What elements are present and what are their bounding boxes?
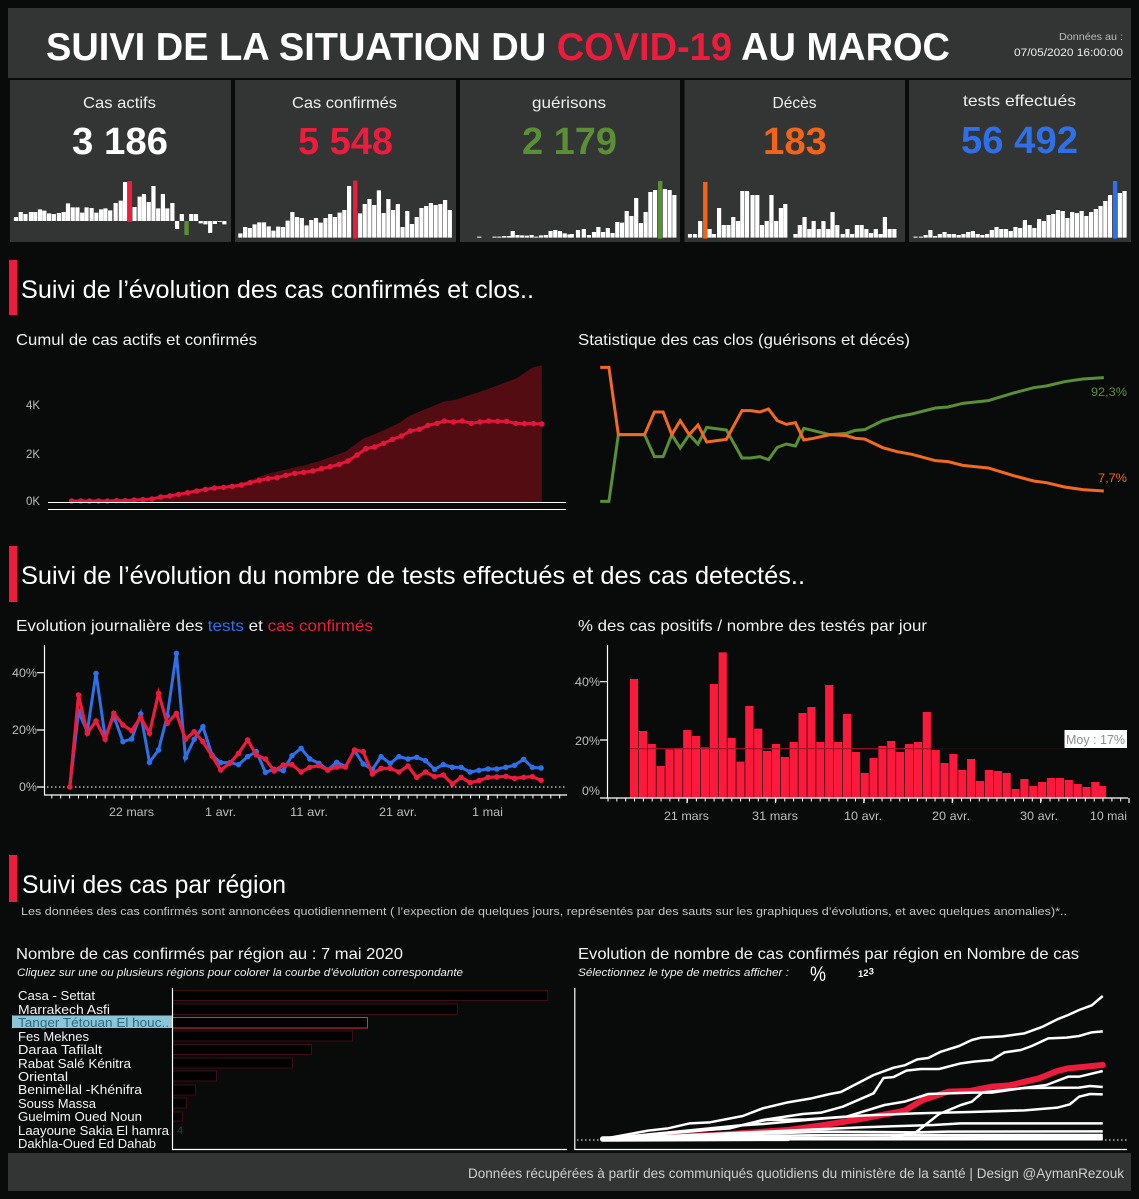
bar chart: cas par région: Dakhla-Oued Ed Dahab	[18, 1136, 156, 1151]
icon: nombres: 3	[869, 966, 874, 978]
bar chart: cas par région: Laayoune Sakia El hamra	[18, 1123, 170, 1138]
label: moyenne: Moy : 17%	[1066, 733, 1125, 747]
header banner	[8, 8, 1131, 78]
label: guérisons 92,3%: 92,3%	[1091, 385, 1127, 399]
icon: nombres: 2	[863, 968, 869, 979]
chart heading: cas par région	[16, 946, 463, 979]
title: SUIVI DE LA SITUATION DU COVID-19 AU MAROC	[46, 26, 950, 69]
icon: pourcentage: %	[810, 963, 826, 986]
data date	[1014, 31, 1123, 59]
chart heading: évolution par région	[578, 946, 1079, 979]
area chart: cumul actifs et confirmés: 4K	[26, 398, 40, 412]
footer: Données récupérées à partir des communiqués quotidiens du ministère de la santé | Design @AymanRezouk	[468, 1166, 1124, 1181]
chart heading: évolution par région: Evolution de nombre de cas confirmés par région en Nombre de cas	[578, 946, 1079, 963]
area chart: cumul actifs et confirmés	[26, 365, 566, 510]
section heading: cas confirmés et clos: Suivi de l’évolution des cas confirmés et clos..	[21, 276, 534, 304]
panel: cas actifs	[10, 80, 231, 242]
panel: guérisons: guérisons	[532, 95, 606, 112]
panel: tests effectués: tests effectués	[963, 93, 1076, 110]
section heading: cas confirmés et clos	[9, 260, 534, 315]
bar chart: cas par région: Rabat Salé Kénitra	[18, 1056, 132, 1071]
line chart: cas clos	[600, 367, 1127, 501]
section heading: région: Suivi des cas par région	[22, 871, 286, 899]
bar chart: cas par région: Oriental	[18, 1069, 68, 1084]
chart heading: cas par région: Cliquez sur une ou plusieurs régions pour colorer la courbe d’évolution correspondante	[17, 967, 463, 979]
bar chart: cas par région	[12, 988, 567, 1151]
panel: tests effectués: 56 492	[961, 120, 1078, 162]
chart heading: cas clos: Statistique des cas clos (guérisons et décés)	[578, 332, 910, 349]
bar chart: % positifs par jour: 10 mai	[1090, 809, 1127, 823]
panel: cas actifs: Cas actifs	[83, 95, 156, 112]
area chart: cumul actifs et confirmés: 0K	[26, 494, 40, 508]
line chart: évolution par région	[575, 988, 1128, 1150]
bar chart: % positifs par jour: 0%	[582, 784, 600, 798]
area chart: cumul actifs et confirmés: 2K	[26, 447, 40, 461]
bar chart: % positifs par jour	[575, 645, 1129, 823]
line chart: tests et cas confirmés: 0%	[19, 780, 37, 794]
panel: cas confirmés: 5 548	[298, 121, 393, 163]
bar chart: % positifs par jour: 20 avr.	[932, 809, 970, 823]
bar chart: cas par région: Souss Massa	[18, 1096, 97, 1111]
panel: décès: 183	[763, 121, 827, 163]
bar chart: cas par région: Benimèllal -Khénifra	[18, 1082, 143, 1097]
panel: guérisons: 2 179	[522, 121, 617, 163]
line chart: tests et cas confirmés: 40%	[12, 666, 37, 680]
section heading: tests: Suivi de l’évolution du nombre de tests effectués et des cas detectés..	[21, 562, 805, 590]
bar chart: % positifs par jour: 20%	[575, 734, 600, 748]
bar chart: % positifs par jour: 31 mars	[752, 809, 798, 823]
bar chart: % positifs par jour: 30 avr.	[1020, 809, 1058, 823]
line chart: tests et cas confirmés: 1 mai	[472, 805, 503, 819]
chart heading: cas par région: Nombre de cas confirmés par région au : 7 mai 2020	[16, 946, 403, 963]
panel: guérisons	[460, 80, 680, 242]
line chart: tests et cas confirmés: 21 avr.	[379, 805, 417, 819]
chart heading: % des cas positifs: % des cas positifs / nombre des testés par jour	[578, 618, 928, 635]
data date: 07/05/2020 16:00:00	[1014, 47, 1123, 59]
chart heading: évolution par région: Sélectionnez le type de metrics afficher :	[578, 967, 789, 979]
line chart: tests et cas confirmés: 11 avr.	[290, 805, 328, 819]
bar chart: cas par région: Casa - Settat	[18, 988, 95, 1003]
bar chart: cas par région: Tanger Tétouan El houc..	[18, 1015, 169, 1030]
bar chart: % positifs par jour: 10 avr.	[844, 809, 882, 823]
bar chart: cas par région: 4	[177, 1125, 183, 1137]
line chart: tests et cas confirmés: 20%	[12, 723, 37, 737]
bar chart: % positifs par jour: 40%	[575, 675, 600, 689]
panel: tests effectués	[909, 80, 1131, 242]
section heading: région	[9, 855, 286, 902]
line chart: tests et cas confirmés	[12, 645, 567, 819]
section heading: tests	[9, 546, 805, 602]
panel: décès	[684, 80, 905, 242]
note: données: Les données des cas confirmés sont annoncées quotidiennement ( l’expection de quelques jours, représentés par des sauts sur les graphiques d’évolutions, et avec quelques anomalies)*..	[21, 906, 1067, 918]
chart heading: évolution journalière: Evolution journalière des tests et cas confirmés	[16, 618, 373, 635]
bar chart: % positifs par jour: 21 mars	[664, 809, 709, 823]
line chart: tests et cas confirmés: 22 mars	[109, 805, 154, 819]
chart heading: cumul: Cumul de cas actifs et confirmés	[16, 332, 257, 349]
line chart: tests et cas confirmés: 1 avr.	[205, 805, 236, 819]
icon: nombres: 1	[858, 969, 863, 980]
bar chart: cas par région: Fes Meknes	[18, 1029, 89, 1044]
bar chart: cas par région: Daraa Tafilalt	[18, 1042, 102, 1057]
panel: cas confirmés	[235, 80, 456, 242]
panel: cas actifs: 3 186	[72, 121, 168, 163]
panel: décès: Décès	[772, 95, 816, 112]
bar chart: cas par région: Marrakech Asfi	[18, 1002, 110, 1017]
footer	[8, 1153, 1131, 1191]
label: décès 7,7%: 7,7%	[1098, 471, 1127, 485]
data date: Données au :	[1059, 31, 1123, 43]
panel: cas confirmés: Cas confirmés	[292, 95, 397, 112]
bar chart: cas par région: Guelmim Oued Noun	[18, 1109, 142, 1124]
